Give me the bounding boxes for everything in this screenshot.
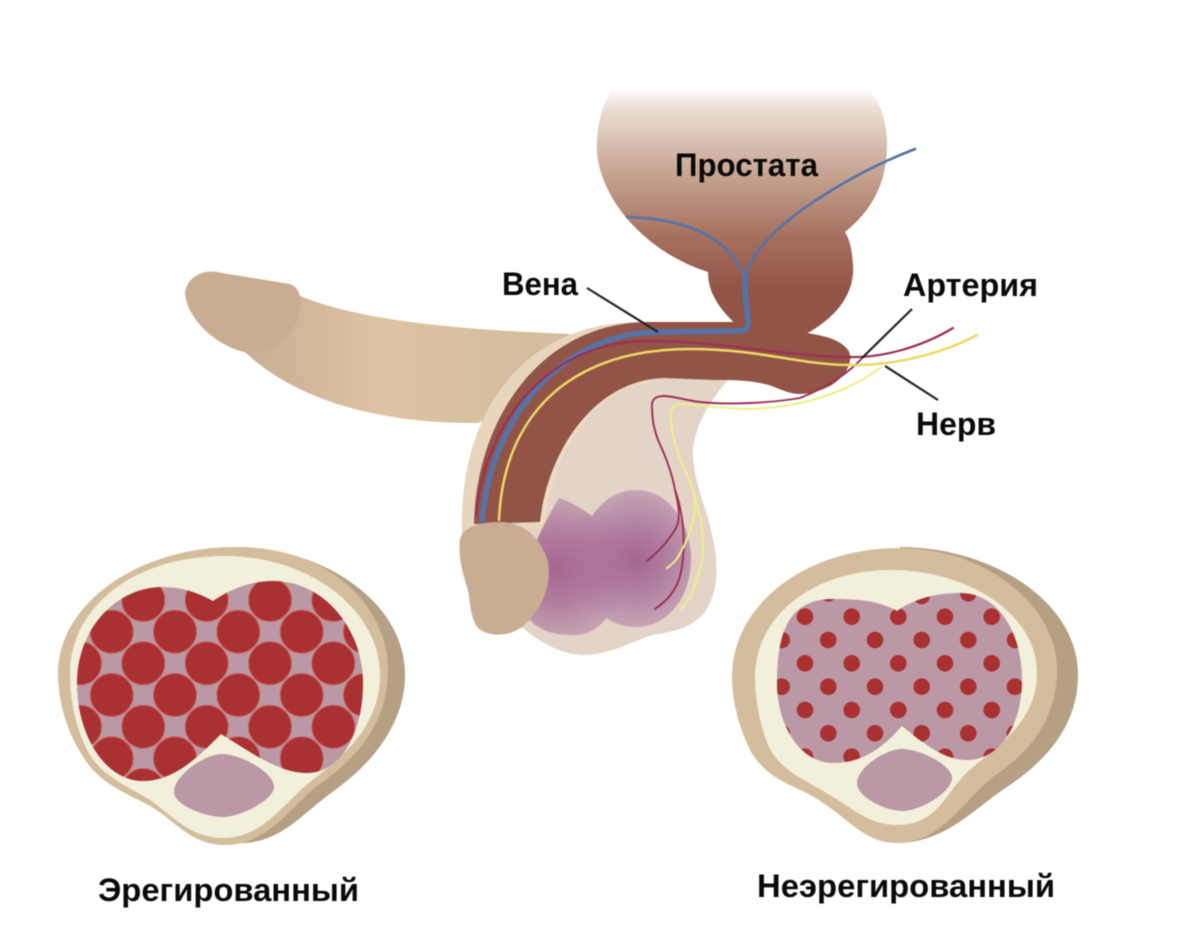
scrotum <box>519 372 732 655</box>
label: artery: Артерия <box>903 267 1038 303</box>
corpora <box>474 322 850 524</box>
vein <box>482 149 915 522</box>
label: prostate: Простата <box>675 147 818 183</box>
caption: erect: Эрегированный <box>98 872 359 908</box>
cross-section: erect <box>58 547 405 845</box>
cross-section: flaccid <box>732 547 1078 843</box>
erectile tissue filled with blood <box>76 580 364 782</box>
leader lines <box>587 288 938 400</box>
shaft with glans <box>185 272 570 423</box>
prostate and bulb <box>597 88 887 334</box>
spongy body <box>174 754 274 817</box>
label: vein: Вена <box>502 266 578 302</box>
label: nerve: Нерв <box>916 406 996 442</box>
caption: flaccid: Неэрегированный <box>757 868 1055 904</box>
erectile tissue with small vessels <box>776 592 1023 764</box>
anatomical diagram <box>58 92 1079 908</box>
spongy body <box>857 749 952 811</box>
testes <box>520 490 691 635</box>
artery <box>476 328 953 609</box>
base of the corpora <box>459 522 549 635</box>
nerve <box>499 335 977 609</box>
outer tissue around corpora <box>462 322 680 535</box>
